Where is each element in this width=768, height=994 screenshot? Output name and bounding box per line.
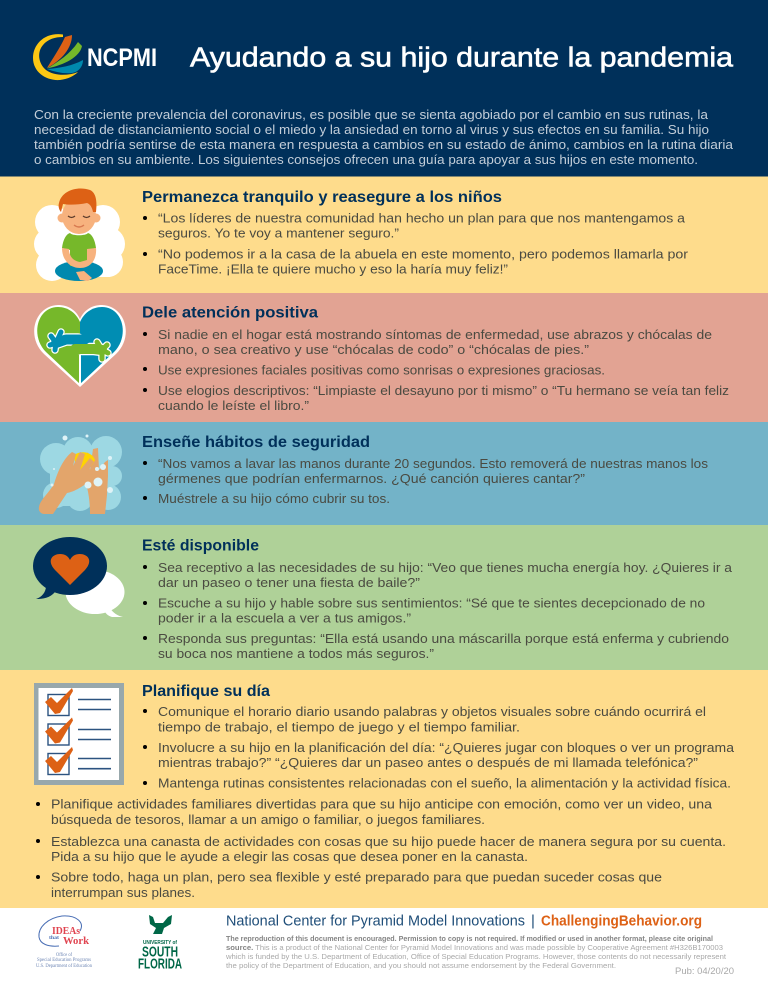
bullet list: Establezca una canasta de actividades con cosas que su hijo puede hacer de manera segura por su cuenta. [51,834,726,849]
bullet list: “Los líderes de nuestra comunidad han hecho un plan para que nos mantengamos a [158,210,686,226]
title: Ayudando a su hijo durante la pandemia [190,42,733,72]
bullet list: Muéstrele a su hijo cómo cubrir su tos. [158,491,390,506]
disclaimer text: source. This is a product of the National Center for Pyramid Model Innovations and was made possible by Cooperative Agreement #H326B170003 [226,943,723,952]
bullet list: cuando le leíste el libro.” [158,398,309,413]
bullet list [143,456,709,506]
bullet list: mano, o sea creativo y use “chócalas de codo” o “chócalas de pies.” [158,342,589,357]
bullet list: tiempo de trabajo, el tiempo de juego y el tiempo familiar. [158,720,520,734]
bullet list: “No podemos ir a la casa de la abuela en este momento, pero podemos llamarla por [158,246,689,262]
bullet list: FaceTime. ¡Ella te quiere mucho y eso la haría muy feliz!” [158,262,508,276]
bullet list: Planifique actividades familiares divertidas para que su hijo anticipe con emoción, como ver un video, una [51,796,713,812]
bullet list: Use elogios descriptivos: “Limpiaste el desayuno por ti mismo” o “Tu hermano se veía tan feliz [158,383,729,398]
bullet list: Mantenga rutinas consistentes relacionadas con el sueño, la alimentación y la actividad física. [158,776,731,790]
footer [36,912,734,976]
logo: University of South Florida: FLORIDA [138,956,182,972]
bullet list [143,560,733,661]
publication date: Pub: 04/20/20 [675,966,734,976]
bullet list: Si nadie en el hogar está mostrando síntomas de enfermedad, use abrazos y chócalas de [158,327,712,342]
bullet list: poder ir a la escuela a ver a tus amigos.” [158,610,411,626]
intro text: Con la creciente prevalencia del coronavirus, es posible que se sienta agobiado por el cambio en sus rutinas, la [34,107,709,122]
bullet list: Use expresiones faciales positivas como sonrisas o expresiones graciosas. [158,362,605,378]
bullet list: su boca nos mantiene a todos más seguros.” [158,646,434,661]
bullet list: Involucre a su hijo en la planificación del día: “¿Quieres jugar con bloques o ver un programa [158,740,735,755]
bullet list: búsqueda de tesoros, llamar a un amigo o familiar, o juegos familiares. [51,812,485,827]
logo: University of South Florida [138,915,182,972]
heading: Planifique su día [142,683,270,700]
disclaimer text [225,934,726,970]
panel: habitos de seguridad [0,422,768,525]
logo: NCPMI [33,34,157,80]
bullet list: “Nos vamos a lavar las manos durante 20 segundos. Esto removerá de nuestras manos los [158,456,709,471]
intro text: o cambios en su ambiente. Los siguientes consejos ofrecen una guía para apoyar a sus hijos en este momento. [34,152,698,167]
intro text: necesidad de distanciamiento social o el miedo y la ansiedad en torno al virus y sus efectos en su familia. Su hijo [34,122,709,137]
organization name and website: ChallengingBehavior.org [541,914,702,930]
logo: NCPMI: NCPMI [87,44,157,72]
panel: permanezca tranquilo [0,176,768,293]
logo: University of South Florida: UNIVERSITY of [143,940,177,946]
logo: University of South Florida: SOUTH [142,944,178,960]
heading: Esté disponible [142,538,259,554]
panel: header [0,0,768,176]
intro text: también podría sentirse de esta manera en respuesta a cambios en su estado de ánimo, cambios en la rutina diaria [34,137,734,152]
heading: Dele atención positiva [142,304,318,322]
icon: calm child [34,189,125,281]
bullet list: gérmenes que podrían enfermarnos. ¿Qué canción quieres cantar?” [158,471,585,486]
bullet list [36,704,735,900]
disclaimer text: the policy of the Department of Education, and you should not assume endorsement by the Federal Government. [226,961,616,970]
logo: IDEAs that Work: Office of [56,953,72,958]
icon: hand washing [39,434,122,514]
logo: IDEAs that Work: IDEAs [52,926,80,937]
bullet list: Responda sus preguntas: “Ella está usando una máscarilla porque está enferma y cubriendo [158,631,729,646]
organization name and website: | [531,912,535,930]
logo: IDEAs that Work: Work [63,935,90,947]
icon: speech bubbles [33,537,124,617]
logo: IDEAs that Work: that [49,935,59,941]
icon: checklist [34,683,124,785]
bullet list: dar un paseo o tener una fiesta de baile?” [158,575,420,590]
logo: IDEAs that Work [36,916,93,969]
intro text [34,107,734,167]
panel: atencion positiva [0,293,768,422]
heading: Enseñe hábitos de seguridad [142,434,370,451]
icon: heart hug [34,305,126,387]
logo: IDEAs that Work: U.S. Department of Education [36,964,93,969]
bullet list: Pida a su hijo que le ayude a elegir las cosas que desea poner en la canasta. [51,849,528,864]
logo: IDEAs that Work: Special Education Programs [37,958,91,963]
bullet list: seguros. Yo te voy a mantener seguro.” [158,226,399,240]
bullet list [143,210,689,276]
bullet list [143,327,729,413]
panel: planifique su dia [0,670,768,908]
panel: este disponible [0,525,768,670]
heading: Permanezca tranquilo y reasegure a los niños [142,189,502,206]
bullet list: Sobre todo, haga un plan, pero sea flexible y esté preparado para que puedan suceder cosas que [51,870,662,884]
bullet list: Comunique el horario diario usando palabras y objetos visuales sobre cuándo ocurrirá el [158,704,706,719]
bullet list: interrumpan sus planes. [51,885,195,900]
bullet list: mientras trabajo?” “¿Quieres dar un paseo antes o después de mi llamada telefónica?” [158,755,698,770]
organization name and website [226,912,702,930]
bullet list: Escuche a su hijo y hable sobre sus sentimientos: “Sé que te sientes decepcionado de no [158,596,705,610]
organization name and website: National Center for Pyramid Model Innovations [226,914,525,930]
bullet list: Sea receptivo a las necesidades de su hijo: “Veo que tienes mucha energía hoy. ¿Quieres ir a [158,560,733,575]
disclaimer text: The reproduction of this document is encouraged. Permission to copy is not required. If modified or used in another format, please cite original [226,934,713,943]
disclaimer text: which is funded by the U.S. Department of Education, Office of Special Education Programs. However, those contents do not necessarily represent [225,952,726,961]
